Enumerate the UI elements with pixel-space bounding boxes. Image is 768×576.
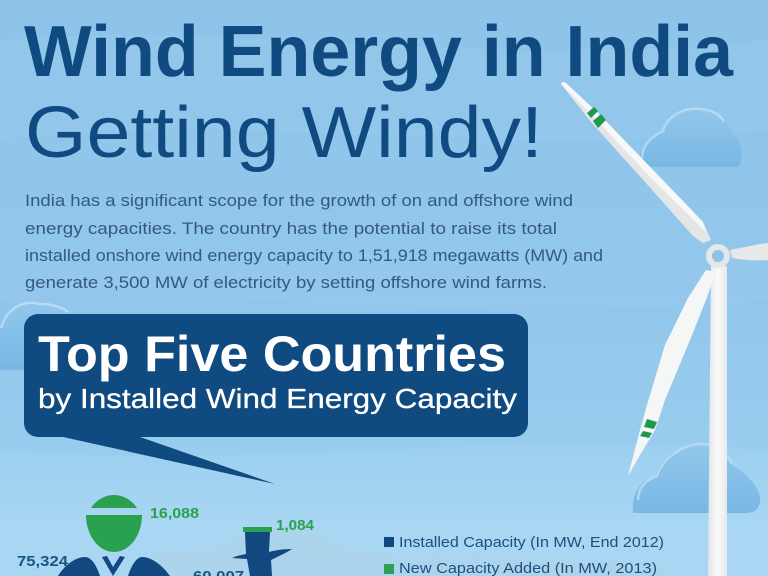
main title: Wind Energy in India xyxy=(24,12,734,92)
turbine hub xyxy=(706,244,730,268)
icon: figure with hat xyxy=(232,527,292,576)
cloud: lower right xyxy=(633,443,760,513)
subtitle: Getting Windy! xyxy=(25,93,543,173)
legend: installed capacity: Installed Capacity (In MW, End 2012) xyxy=(399,534,664,551)
blade: lower left xyxy=(628,270,716,476)
intro paragraph: generate 3,500 MW of electricity by setting offshore wind farms. xyxy=(25,273,547,292)
legend xyxy=(384,534,664,576)
cloud: upper right xyxy=(639,108,742,167)
callout heading box xyxy=(24,314,528,484)
intro paragraph: India has a significant scope for the growth of on and offshore wind xyxy=(25,191,573,210)
wind turbine xyxy=(561,82,768,576)
callout subtitle: by Installed Wind Energy Capacity xyxy=(38,383,517,414)
blade: right xyxy=(730,243,768,260)
icon: figure with green head xyxy=(58,495,170,576)
intro paragraph xyxy=(25,191,603,292)
intro paragraph: energy capacities. The country has the potential to raise its total xyxy=(25,219,557,238)
callout title: Top Five Countries xyxy=(38,326,506,382)
turbine tower xyxy=(708,266,727,576)
value: 75,324: 75,324 xyxy=(17,554,68,570)
intro paragraph: installed onshore wind energy capacity to 1,51,918 megawatts (MW) and xyxy=(25,246,603,265)
value: 1,084: 1,084 xyxy=(276,518,314,534)
value: 16,088: 16,088 xyxy=(150,506,199,522)
cloud: left behind callout xyxy=(0,300,70,370)
blade: upper left xyxy=(561,82,711,243)
